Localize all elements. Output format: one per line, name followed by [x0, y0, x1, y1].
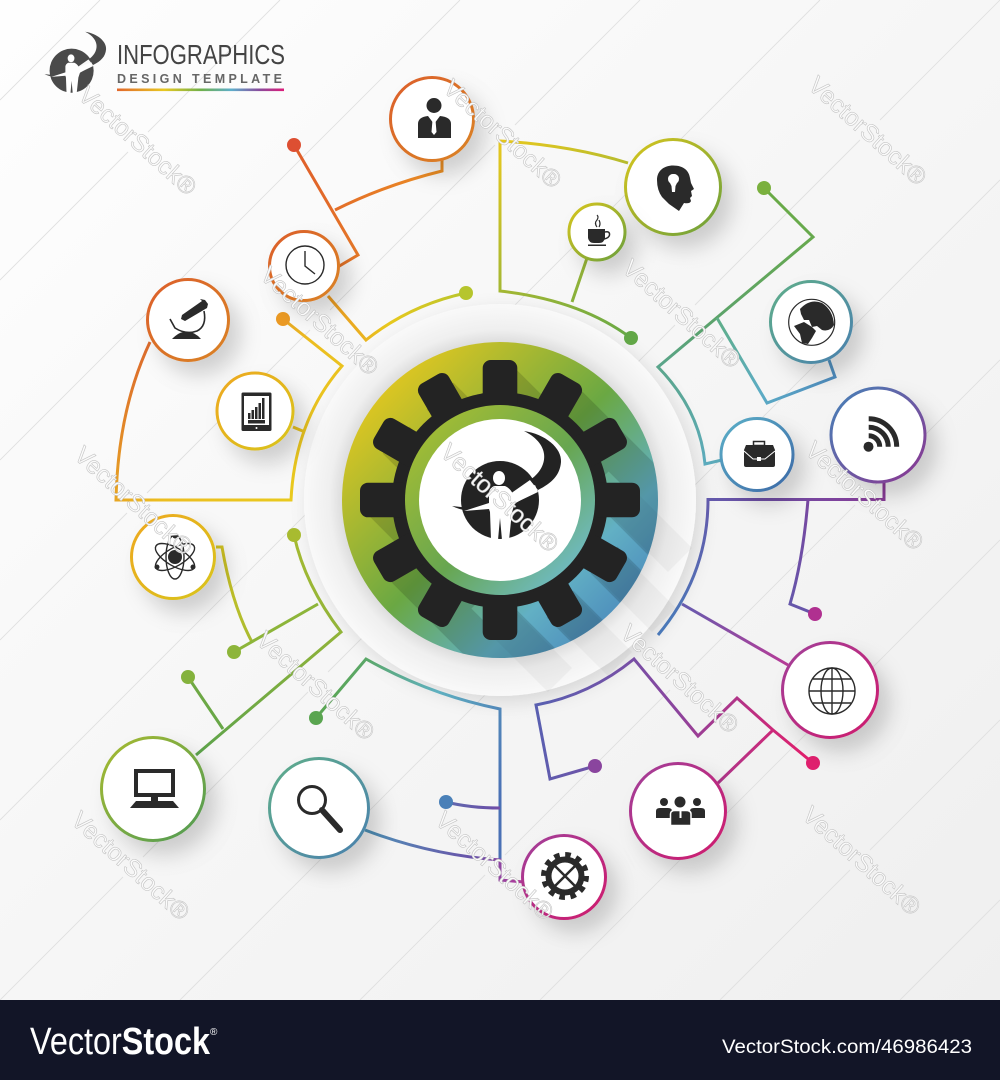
- watermarks: VectorStock®: [430, 807, 558, 926]
- connector lines: [116, 138, 884, 882]
- icon: head with bulb: [657, 166, 694, 211]
- connector: web globe: [682, 604, 788, 665]
- watermarks: VectorStock®: [435, 439, 563, 558]
- icon: magnifier: [298, 786, 340, 830]
- icon: computer: [130, 769, 179, 808]
- hub coloured circle: [342, 342, 658, 658]
- node: briefcase: [721, 418, 793, 490]
- node: clock: [270, 232, 338, 300]
- icon: business person: [418, 98, 451, 138]
- node: web globe: [782, 642, 878, 738]
- connector: atom: [216, 547, 252, 642]
- white centre: [419, 419, 581, 581]
- watermarks: VectorStock®: [615, 620, 743, 739]
- watermarks: VectorStock®: [251, 627, 379, 746]
- connector: clock to top dot: [328, 286, 473, 340]
- watermarks: VectorStock®: [66, 807, 194, 926]
- node: tablet: [217, 373, 293, 449]
- watermarks: VectorStock®: [797, 802, 925, 921]
- logo: infographics template: [44, 32, 285, 93]
- footer image id: VectorStock.com/46986423: [722, 1037, 972, 1058]
- connector: wifi: [658, 480, 884, 635]
- logo title: INFOGRAPHICS: [117, 39, 285, 70]
- logo mark: [44, 32, 106, 93]
- node: earth: [770, 282, 852, 362]
- connector: briefcase: [658, 181, 813, 464]
- gear shadow outside disc: [500, 500, 680, 680]
- connector: earth: [717, 318, 835, 403]
- watermarks: VectorStock®: [803, 72, 931, 191]
- watermarks: VectorStock®: [800, 437, 928, 556]
- gear long shadow: [370, 370, 658, 658]
- gear inner ring: [405, 405, 595, 595]
- node: atom: [132, 516, 214, 598]
- icon: atom: [151, 534, 199, 579]
- connector: magnifier: [365, 795, 524, 882]
- node: person: [390, 78, 474, 160]
- footer bar: [0, 1000, 1000, 1080]
- watermarks: VectorStock®: [255, 262, 383, 381]
- connector: people and globe grid: [536, 659, 820, 783]
- icon: coffee cup: [588, 215, 610, 246]
- icon: clock: [286, 246, 324, 284]
- icon: tablet chart: [242, 392, 272, 431]
- watermarks: [66, 72, 931, 926]
- footer brand: VectorStock: [30, 1021, 211, 1063]
- connector: microscope and tablet: [116, 312, 342, 500]
- rainbow rule: [117, 88, 284, 91]
- icon: rss signal: [864, 419, 897, 452]
- icon: earth: [789, 299, 835, 345]
- connector: atom branch to dot: [227, 604, 318, 659]
- node: magnifier: [270, 758, 368, 858]
- icon: team: [656, 796, 705, 826]
- node: settings gear: [522, 836, 606, 918]
- node: head idea: [626, 140, 720, 234]
- icon: settings gear: [544, 855, 586, 897]
- gear: [360, 360, 640, 640]
- watermarks: VectorStock®: [73, 82, 201, 201]
- watermarks: VectorStock®: [617, 255, 745, 374]
- icon: briefcase: [744, 442, 775, 467]
- connector: computer: [181, 528, 341, 755]
- icon: wireframe globe: [809, 668, 855, 714]
- central disc: [304, 304, 696, 696]
- node: wifi: [831, 388, 925, 482]
- node: computer: [102, 738, 204, 840]
- node: microscope: [148, 280, 228, 360]
- node: coffee: [569, 204, 625, 260]
- watermarks: VectorStock®: [69, 442, 197, 561]
- connector: person and clock: [287, 138, 442, 268]
- central hub: [342, 342, 690, 690]
- watermarks: VectorStock®: [438, 75, 566, 194]
- connector: head and coffee: [500, 141, 638, 345]
- logo subtitle: DESIGN TEMPLATE: [117, 72, 282, 86]
- connector: gear settings: [309, 659, 500, 860]
- node: people: [630, 764, 726, 858]
- icon: microscope: [170, 299, 208, 339]
- centre logo mark: [452, 431, 561, 540]
- registered mark: ®: [210, 1027, 218, 1038]
